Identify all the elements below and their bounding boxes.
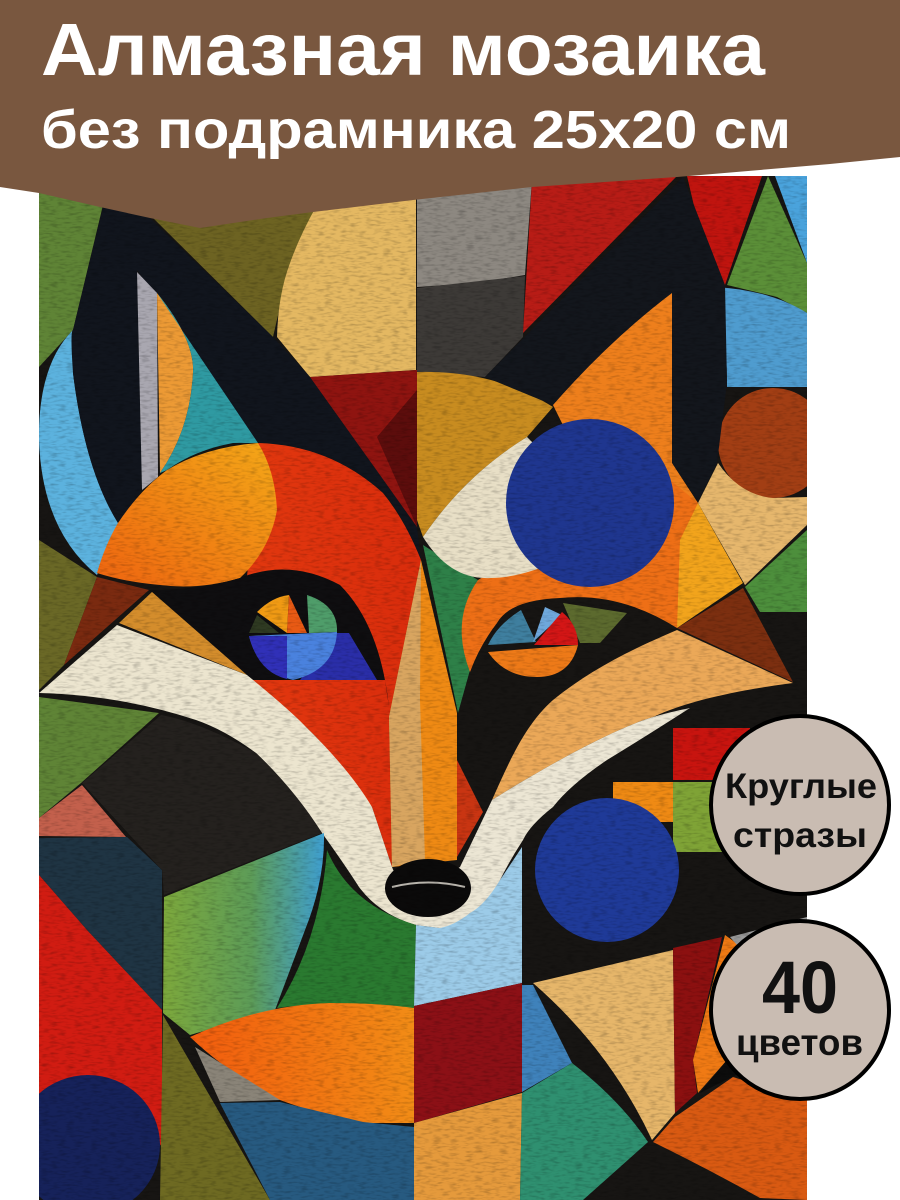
centre muzzle — [389, 545, 483, 867]
centre forehead — [310, 370, 553, 537]
lower centre blocks — [190, 847, 648, 1200]
badge: 40 colours: цветов — [736, 1022, 863, 1063]
badge: round rhinestones: стразы — [733, 816, 867, 855]
painting: geometric fox mosaic — [16, 176, 828, 1200]
white band left — [39, 625, 416, 925]
tan cheek right — [492, 630, 793, 800]
upper background blocks — [39, 176, 828, 690]
tan triangle left — [119, 592, 247, 675]
blue circle upper — [506, 419, 674, 587]
left ear — [72, 207, 421, 560]
subtitle: без подрамника 25х20 см — [41, 100, 791, 160]
brown triangle right — [677, 588, 793, 682]
left eye — [149, 569, 389, 707]
title: Алмазная мозаика — [41, 8, 766, 91]
badge: round rhinestones: Круглые — [725, 767, 877, 806]
badge: 40 colours: 40 — [762, 946, 838, 1029]
nose — [385, 859, 471, 917]
lower left blocks — [16, 697, 324, 1200]
yellow triangle right — [677, 503, 743, 628]
left orange and red face — [64, 443, 421, 867]
lower right blocks — [533, 917, 807, 1200]
white band right — [400, 708, 690, 928]
badge: round rhinestones — [711, 716, 889, 894]
right ear — [485, 178, 727, 504]
right face orange — [462, 480, 698, 672]
right eye — [488, 603, 627, 677]
header banner — [0, 0, 900, 228]
rectangles and lower blue circle — [535, 728, 750, 942]
badge: 40 colours — [711, 921, 889, 1099]
white eye shape — [423, 437, 538, 578]
